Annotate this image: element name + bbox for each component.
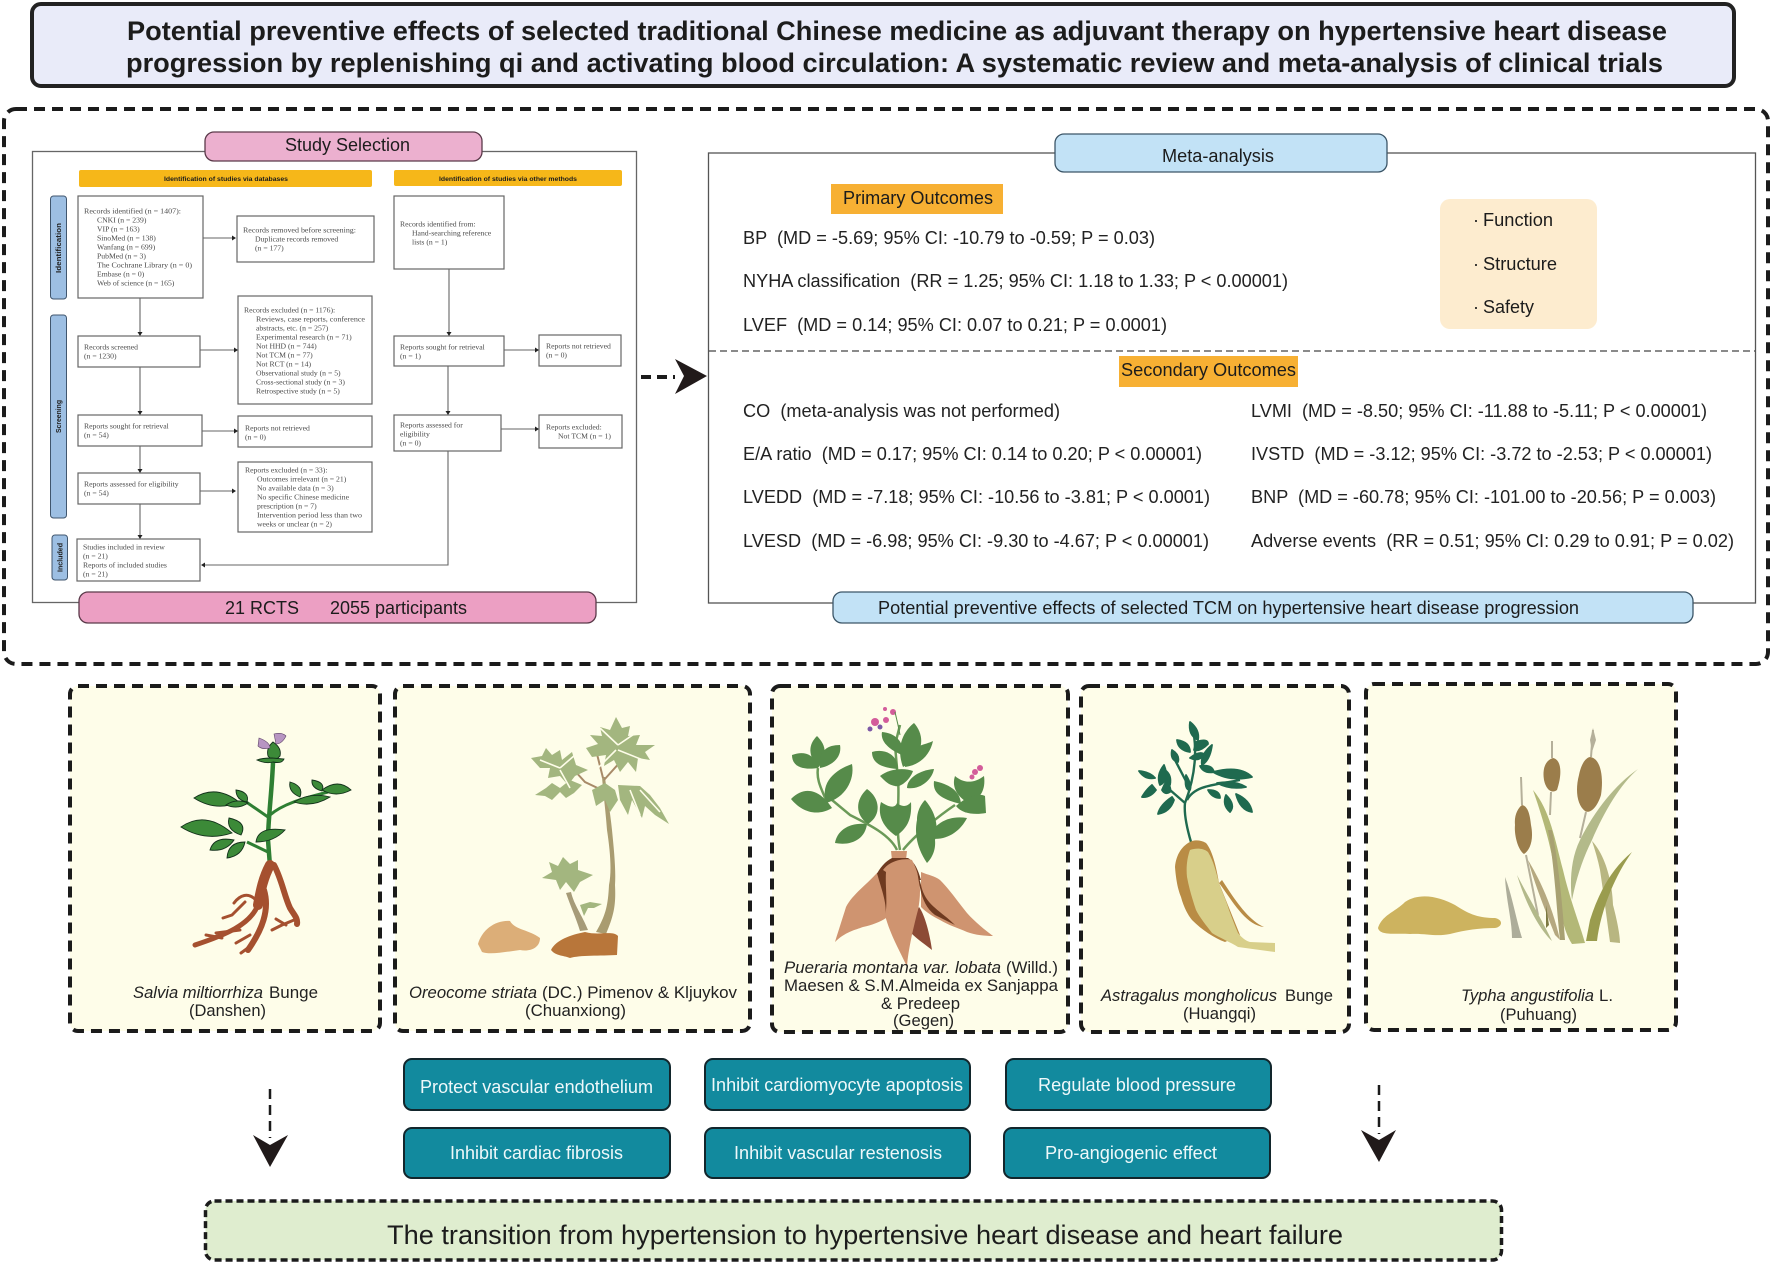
text block: secondary outcomes left column: CO (meta-analysis was not performed) — [743, 401, 1060, 421]
title: Potential preventive effects of selected traditional Chinese medicine as adjuvant therapy on hypertensive heart disease — [127, 16, 1667, 46]
caption: Danshen — [133, 984, 318, 1020]
box: records excluded: Reviews, case reports, conference — [256, 314, 366, 324]
callout: function structure safety: · — [1473, 254, 1479, 274]
box: other records identified: Records identified from: — [400, 220, 476, 228]
box: other reports excluded: Reports excluded: — [546, 422, 602, 432]
text block: primary outcomes results: BP (MD = -5.69; 95% CI: -10.79 to -0.59; P = 0.03) — [743, 228, 1155, 248]
arrow: right down arrow — [1361, 1085, 1396, 1162]
title: progression by replenishing qi and activating blood circulation: A systematic review and meta-analysis of clinical trials — [126, 48, 1663, 78]
box: records identified: PubMed (n = 3) — [97, 252, 146, 260]
box: reports excluded: Reports excluded (n = 33): — [245, 466, 327, 474]
box: reports not retrieved — [238, 416, 372, 447]
title — [32, 4, 1734, 86]
text block: secondary outcomes left column — [743, 401, 1210, 551]
mechanism: inhibit vascular restenosis — [705, 1128, 970, 1178]
mechanism: regulate blood pressure — [1006, 1059, 1271, 1110]
box: other reports sought — [394, 336, 504, 366]
mechanism: inhibit cardiomyocyte apoptosis — [705, 1059, 970, 1110]
box: records screened — [78, 336, 200, 367]
banner: potential preventive effects: Potential preventive effects of selected TCM on hypertensive heart disease progression — [878, 598, 1579, 618]
box: records removed — [237, 216, 374, 262]
box: records removed: (n = 177) — [255, 244, 284, 252]
box: other reports assessed: (n = 0) — [400, 438, 421, 448]
caption: Huangqi: (Huangqi) — [1183, 1005, 1256, 1023]
box: records identified: CNKI (n = 239) — [97, 216, 147, 224]
box: other reports not retrieved: Reports not retrieved — [546, 342, 611, 350]
text block: secondary outcomes left column: LVEDD (MD = -7.18; 95% CI: -10.56 to -3.81; P < 0.0001) — [743, 487, 1210, 507]
text block: primary outcomes results: LVEF (MD = 0.14; 95% CI: 0.07 to 0.21; P = 0.0001) — [743, 315, 1167, 335]
text block: primary outcomes results: NYHA classification (RR = 1.25; 95% CI: 1.18 to 1.33; P < 0.00001) — [743, 271, 1288, 291]
sidebar: identification: Identification — [56, 223, 63, 273]
label: secondary outcomes: Secondary Outcomes — [1121, 360, 1296, 380]
header: other methods — [394, 170, 622, 186]
box: studies included: Reports of included studies — [83, 560, 167, 570]
box: records screened: (n = 1230) — [84, 352, 117, 360]
caption: Puhuang — [1461, 987, 1613, 1024]
caption: Huangqi: Bunge — [1285, 987, 1333, 1005]
arrow: left down arrow — [253, 1089, 288, 1167]
box: reports sought: (n = 54) — [84, 430, 109, 440]
text block: primary outcomes results — [743, 228, 1288, 335]
arrow: study selection to meta-analysis — [641, 359, 707, 394]
box: reports not retrieved: (n = 0) — [245, 432, 266, 442]
icon: Salvia plant — [181, 733, 351, 953]
panel: Danshen — [70, 686, 380, 1031]
caption: Gegen: (Gegen) — [893, 1012, 954, 1030]
mechanism: pro-angiogenic effect — [1004, 1128, 1270, 1178]
mechanism: inhibit cardiac fibrosis: Inhibit cardiac fibrosis — [450, 1143, 623, 1163]
sidebar: screening — [50, 315, 66, 518]
panel: meta-analysis — [708, 134, 1756, 623]
callout: function structure safety: · — [1473, 210, 1479, 230]
header: databases: Identification of studies via databases — [164, 176, 288, 183]
caption: Gegen: Maesen & S.M.Almeida ex Sanjappa — [784, 977, 1059, 995]
header: databases — [79, 170, 372, 187]
box: studies included: Studies included in review — [83, 542, 165, 552]
box: records excluded: Not TCM (n = 77) — [256, 350, 313, 360]
panel: Chuanxiong — [395, 686, 750, 1031]
box: records excluded: Not HHD (n = 744) — [256, 342, 317, 350]
box: records excluded: Retrospective study (n = 5) — [256, 386, 340, 396]
banner: RCT count and participants — [79, 592, 596, 623]
caption: Puhuang: Typha angustifolia — [1461, 987, 1594, 1005]
banner: RCT count and participants: 21 RCTS — [225, 598, 299, 618]
box: records excluded: Experimental research (n = 71) — [256, 332, 352, 342]
mechanism: pro-angiogenic effect: Pro-angiogenic effect — [1045, 1143, 1217, 1163]
box: records excluded — [238, 296, 372, 404]
text block: secondary outcomes right column: Adverse events (RR = 0.51; 95% CI: 0.29 to 0.91; P = 0.02) — [1251, 531, 1734, 551]
heading: study selection — [205, 132, 482, 161]
box: reports assessed: (n = 54) — [84, 488, 109, 498]
mechanism: protect vascular endothelium — [404, 1059, 670, 1110]
banner: RCT count and participants: 2055 participants — [330, 598, 467, 618]
box: records identified: SinoMed (n = 138) — [97, 234, 156, 242]
callout: function structure safety: Structure — [1483, 254, 1557, 274]
box: other records identified: Hand-searching reference — [412, 228, 492, 238]
caption: Chuanxiong: (DC.) Pimenov & Kljuykov — [542, 984, 738, 1002]
mechanism: regulate blood pressure: Regulate blood pressure — [1038, 1075, 1236, 1095]
icon: Pueraria plant — [791, 707, 993, 967]
caption: Gegen: (Willd.) — [1006, 959, 1058, 977]
mechanism: inhibit cardiomyocyte apoptosis: Inhibit cardiomyocyte apoptosis — [711, 1075, 963, 1095]
box: other reports assessed: eligibility — [400, 430, 430, 438]
box: records identified — [78, 196, 203, 298]
box: records excluded: Records excluded (n = 1176): — [244, 306, 335, 314]
box: records removed: Duplicate records removed — [255, 234, 338, 244]
box: reports excluded: Outcomes irrelevant (n = 21) — [257, 474, 347, 484]
caption: Danshen: (Danshen) — [189, 1002, 266, 1020]
callout: function structure safety: · — [1473, 297, 1479, 317]
box: records identified: Records identified (n = 1407): — [84, 206, 181, 216]
caption: Danshen: Salvia miltiorrhiza — [133, 984, 263, 1002]
callout: function structure safety: Safety — [1483, 297, 1534, 317]
box: studies included — [77, 539, 200, 581]
banner: potential preventive effects — [833, 592, 1693, 623]
box: other records identified — [394, 196, 504, 269]
text block: secondary outcomes right column: LVMI (MD = -8.50; 95% CI: -11.88 to -5.11; P < 0.00001) — [1251, 401, 1707, 421]
box: records excluded: abstracts, etc. (n = 257) — [256, 324, 329, 332]
box: studies included: (n = 21) — [83, 570, 108, 578]
box: records identified: Web of science (n = 165) — [97, 278, 175, 288]
box: other reports sought: Reports sought for retrieval — [400, 342, 485, 352]
text block: secondary outcomes left column: E/A ratio (MD = 0.17; 95% CI: 0.14 to 0.20; P < 0.00001) — [743, 444, 1202, 464]
box: other reports excluded — [539, 415, 622, 448]
caption: Puhuang: L. — [1599, 987, 1613, 1005]
panel: Puhuang — [1366, 684, 1676, 1030]
box: other reports excluded: Not TCM (n = 1) — [558, 432, 611, 440]
box: reports not retrieved: Reports not retrieved — [245, 424, 310, 432]
icon: Typha plant and pollen — [1378, 728, 1638, 944]
box: studies included: (n = 21) — [83, 552, 108, 560]
caption: Huangqi: Astragalus mongholicus — [1100, 987, 1277, 1005]
box: records excluded: Not RCT (n = 14) — [256, 360, 311, 368]
box: records identified: Embase (n = 0) — [97, 270, 145, 278]
box: records identified: The Cochrane Library (n = 0) — [97, 260, 192, 270]
text block: secondary outcomes left column: LVESD (MD = -6.98; 95% CI: -9.30 to -4.67; P < 0.00001) — [743, 531, 1209, 551]
callout: function structure safety — [1440, 199, 1597, 329]
label: primary outcomes — [831, 184, 1003, 214]
caption: Gegen: Pueraria montana var. lobata — [784, 959, 1001, 977]
flowchart arrows — [138, 236, 539, 568]
box: reports sought: Reports sought for retrieval — [84, 422, 169, 430]
box: records identified: VIP (n = 163) — [97, 224, 140, 234]
box: records removed: Records removed before screening: — [243, 226, 356, 234]
box: other reports not retrieved — [539, 335, 621, 366]
banner: transition to heart failure — [206, 1201, 1502, 1260]
box: reports assessed: Reports assessed for eligibility — [84, 480, 179, 488]
caption: Huangqi — [1100, 987, 1333, 1023]
box: reports excluded: prescription (n = 7) — [257, 502, 317, 510]
box: reports assessed — [78, 473, 200, 504]
mechanism: inhibit cardiac fibrosis — [404, 1128, 670, 1178]
icon: Oreocome plant — [478, 717, 669, 958]
heading: meta-analysis — [1055, 134, 1387, 172]
box: records identified: Wanfang (n = 699) — [97, 242, 156, 252]
box: other records identified: lists (n = 1) — [412, 238, 448, 246]
caption: Puhuang: (Puhuang) — [1500, 1006, 1577, 1024]
sidebar: screening: Screening — [56, 400, 63, 433]
banner: transition to heart failure: The transition from hypertension to hypertensive heart disease and heart failure — [387, 1220, 1343, 1250]
box: reports excluded: No available data (n = 3) — [257, 484, 334, 492]
box: reports excluded: Intervention period less than two — [257, 510, 362, 520]
box: records screened: Records screened — [84, 342, 138, 352]
box: reports sought — [78, 415, 202, 446]
heading: study selection: Study Selection — [285, 135, 410, 155]
callout: function structure safety: Function — [1483, 210, 1553, 230]
panel: study selection — [32, 132, 636, 623]
caption: Gegen — [784, 959, 1059, 1030]
icon: Astragalus plant — [1139, 722, 1275, 952]
mechanism: protect vascular endothelium: Protect vascular endothelium — [420, 1077, 653, 1097]
box: reports excluded: No specific Chinese medicine — [257, 492, 350, 502]
caption: Chuanxiong — [409, 984, 738, 1020]
box: records excluded: Observational study (n = 5) — [256, 368, 341, 378]
panel: Gegen — [772, 686, 1068, 1032]
text block: secondary outcomes right column: IVSTD (MD = -3.12; 95% CI: -3.72 to -2.53; P < 0.00001) — [1251, 444, 1712, 464]
box: other reports assessed — [394, 415, 501, 451]
caption: Gegen: & Predeep — [881, 995, 960, 1013]
caption: Danshen: Bunge — [269, 984, 318, 1002]
heading: meta-analysis: Meta-analysis — [1162, 146, 1274, 166]
header: other methods: Identification of studies via other methods — [439, 176, 577, 183]
box: reports excluded — [238, 462, 372, 532]
caption: Chuanxiong: (Chuanxiong) — [525, 1002, 626, 1020]
box: other reports assessed: Reports assessed for — [400, 420, 463, 430]
text block: secondary outcomes right column — [1251, 401, 1734, 551]
box: records excluded: Cross-sectional study (n = 3) — [256, 378, 345, 386]
label: secondary outcomes — [1119, 356, 1298, 387]
sidebar: identification — [50, 196, 66, 299]
box: other reports sought: (n = 1) — [400, 352, 421, 360]
panel: dashed study overview frame — [4, 109, 1768, 664]
label: primary outcomes: Primary Outcomes — [843, 188, 993, 208]
sidebar: included: Included — [58, 543, 64, 572]
mechanism: inhibit vascular restenosis: Inhibit vascular restenosis — [734, 1143, 942, 1163]
box: reports excluded: weeks or unclear (n = 2) — [257, 520, 332, 528]
sidebar: included — [52, 535, 68, 580]
panel: Huangqi — [1081, 686, 1349, 1032]
box: other reports not retrieved: (n = 0) — [546, 350, 567, 360]
text block: secondary outcomes right column: BNP (MD = -60.78; 95% CI: -101.00 to -20.56; P = 0.003) — [1251, 487, 1716, 507]
caption: Chuanxiong: Oreocome striata — [409, 984, 537, 1002]
